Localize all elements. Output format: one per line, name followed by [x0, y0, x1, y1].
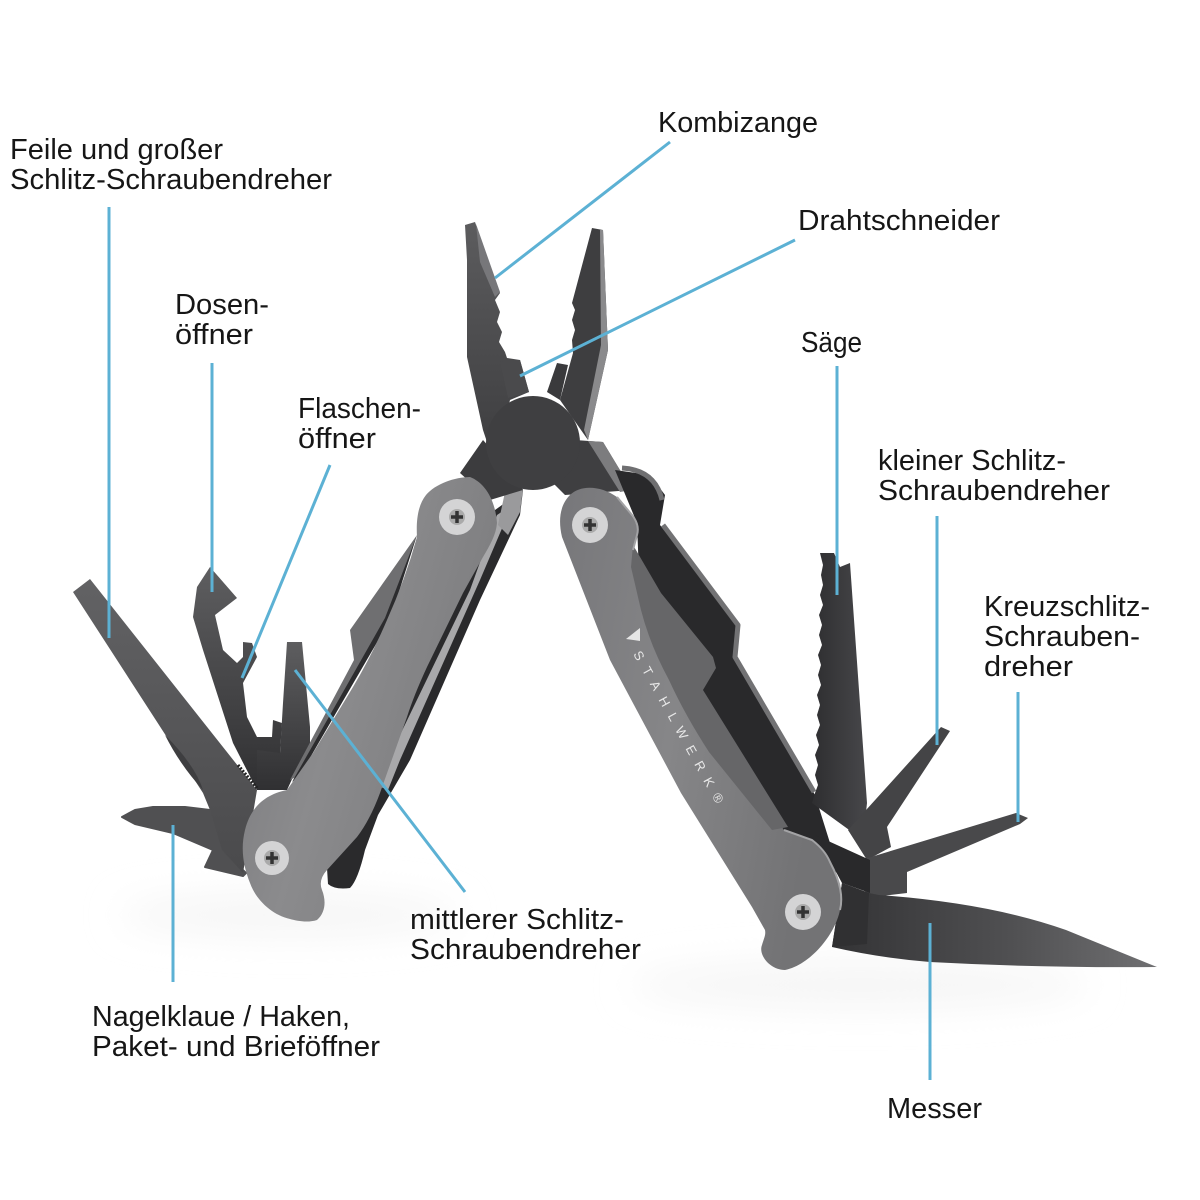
- callout: Flaschenöffner: Flaschen-: [298, 393, 421, 425]
- callout: Dosenöffner: [175, 289, 269, 592]
- callout: Feile: [10, 134, 332, 638]
- multitool: [73, 222, 1157, 970]
- tool: small slotted screwdriver: [848, 727, 950, 860]
- ground shadow: [120, 895, 1090, 1007]
- left side tools: [73, 567, 310, 876]
- callout: Kreuzschlitz-Schraubendreher: [984, 591, 1150, 822]
- pliers link left: [460, 440, 523, 500]
- tool: saw: [812, 553, 867, 840]
- left jaw: [465, 222, 529, 445]
- right handle: [560, 488, 841, 970]
- tool: nail hook and letter opener: [122, 807, 246, 876]
- callout: Kreuzschlitz-Schraubendreher: dreher: [984, 651, 1073, 683]
- cutter right: [547, 363, 568, 400]
- pliers: [465, 222, 608, 490]
- callout: Drahtschneider: Drahtschneider: [798, 205, 1000, 237]
- pivot head: [486, 396, 580, 490]
- callout: Kreuzschlitz-Schraubendreher: Kreuzschlitz-: [984, 591, 1150, 623]
- left handle back panel: [290, 535, 417, 780]
- link plate with hole: [498, 488, 523, 535]
- callout: Nagelklaue: Nagelklaue / Haken,: [92, 1001, 350, 1033]
- left handle dark back edge: [327, 490, 523, 888]
- tool: medium slotted screwdriver: [257, 642, 310, 790]
- callout: Kreuzschlitz-Schraubendreher: Schrauben-: [984, 621, 1140, 653]
- screw: left top: [439, 499, 475, 535]
- callout: Drahtschneider: [520, 205, 1000, 376]
- callout: Dosenöffner: öffner: [175, 319, 253, 351]
- cutter left: [500, 360, 529, 398]
- screw: right bottom: [785, 894, 821, 930]
- right jaw: [560, 228, 608, 440]
- callout: Kombizange: Kombizange: [658, 107, 818, 139]
- callout: Kombizange: [495, 107, 818, 278]
- screw: left bottom: [255, 841, 289, 875]
- callout: kleiner Schlitz-Schraubendreher: [878, 445, 1110, 745]
- callout: Flaschenöffner: [242, 393, 421, 678]
- callout: Säge: Säge: [801, 327, 862, 359]
- callout: Feile: Schlitz-Schraubendreher: [10, 164, 332, 196]
- right handle dark cavity: [615, 470, 840, 875]
- tool: file and large slotted screwdriver: [73, 579, 257, 873]
- logo: STAHLWERK®: [630, 648, 727, 806]
- right side tools: [615, 468, 1157, 967]
- callout: Nagelklaue: Paket- und Brieföffner: [92, 1031, 380, 1063]
- callout: kleiner Schlitz-Schraubendreher: Schraubendreher: [878, 475, 1110, 507]
- callout: Feile: Feile und großer: [10, 134, 223, 166]
- left handle: [243, 477, 497, 922]
- callout: Dosenöffner: Dosen-: [175, 289, 269, 321]
- callout: Nagelklaue: [92, 825, 380, 1063]
- callout: Flaschenöffner: öffner: [298, 423, 376, 455]
- callout: mittlerer Schlitz-Schraubendreher: mittlerer Schlitz-: [410, 904, 624, 936]
- right handle inner panel: [631, 545, 788, 830]
- tool: knife: [832, 883, 1157, 967]
- callout: Messer: Messer: [887, 1093, 982, 1125]
- callout: mittlerer Schlitz-Schraubendreher: Schraubendreher: [410, 934, 641, 966]
- tool: Phillips screwdriver: [836, 813, 1028, 897]
- pliers link right: [550, 440, 632, 495]
- callout: mittlerer Schlitz-Schraubendreher: [295, 670, 641, 966]
- screw: right top: [572, 507, 608, 543]
- callout: kleiner Schlitz-Schraubendreher: kleiner Schlitz-: [878, 445, 1066, 477]
- tool: can and bottle opener: [193, 567, 287, 790]
